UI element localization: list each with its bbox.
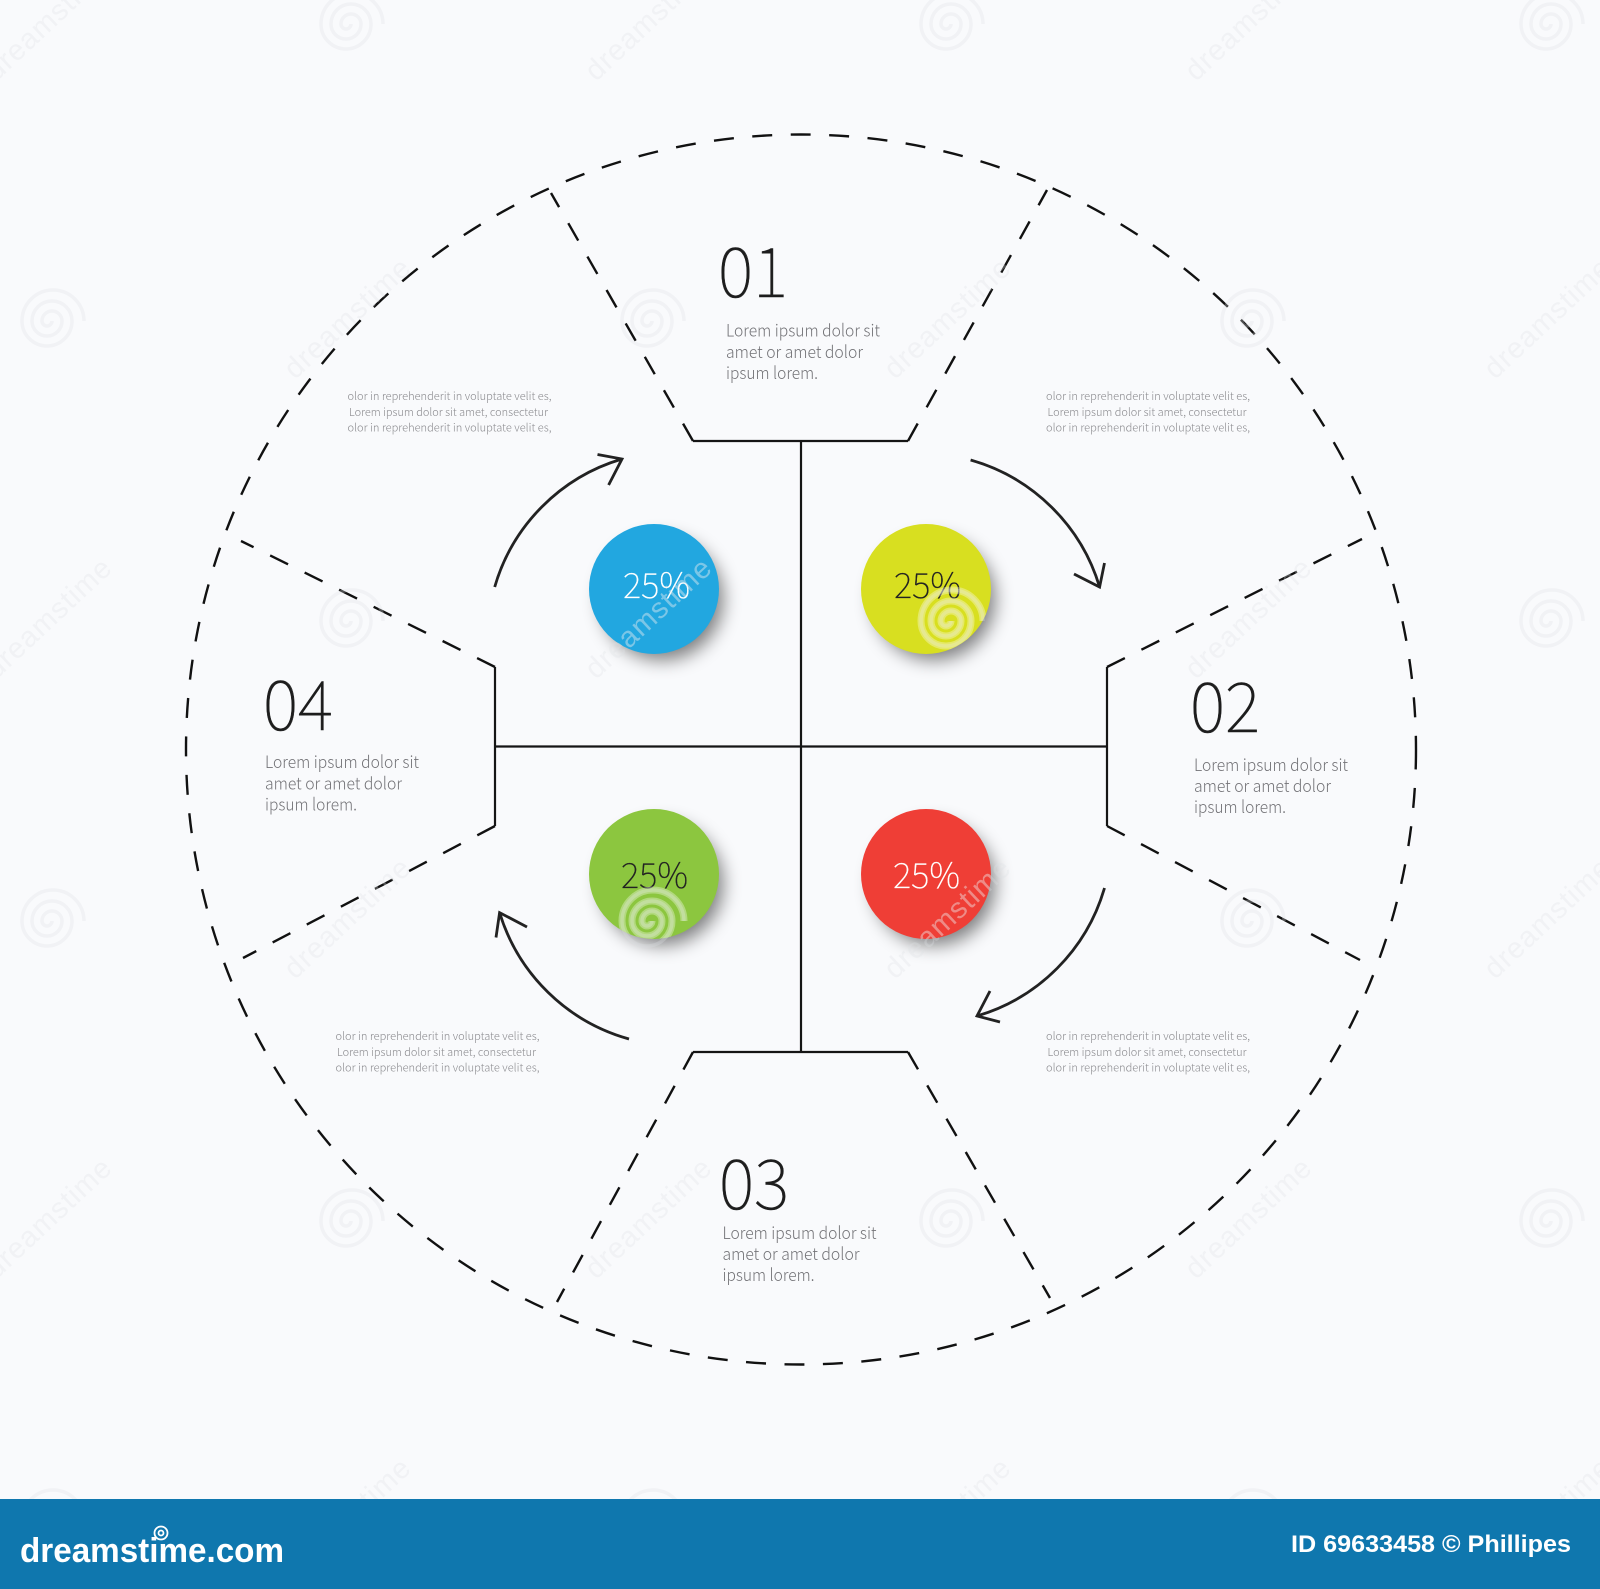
number 02 with caption: ipsum lorem. (1194, 793, 1286, 818)
arrow: top right (971, 460, 1104, 587)
panel: segment 02 outline (1107, 539, 1362, 960)
small text block: top left: olor in reprehenderit in voluptate velit es, (348, 420, 552, 436)
panel: segment 03 outline (557, 1052, 1050, 1302)
number 01 with caption: 01 (718, 217, 788, 317)
small text block: bottom right: olor in reprehenderit in voluptate velit es, (1046, 1060, 1250, 1076)
panel: segment 01 outline (551, 190, 1047, 441)
small text block: top left: Lorem ipsum dolor sit amet, consectetur (349, 404, 548, 420)
number 03 with caption: amet or amet dolor (722, 1240, 860, 1265)
watermark text: dreamstime (1179, 1152, 1319, 1285)
arrow: bottom right (977, 888, 1104, 1022)
badge: red 25%: 25% (893, 848, 960, 899)
dashed outer circle (186, 134, 1416, 1364)
watermark text: dreamstime (878, 252, 1018, 385)
number 01 with caption: ipsum lorem. (726, 359, 818, 384)
number 01 with caption: Lorem ipsum dolor sit (726, 316, 880, 342)
watermark overlay on badges: dreamstime (579, 552, 719, 685)
number 04 with caption: Lorem ipsum dolor sit (265, 748, 419, 773)
watermark text: dreamstime (278, 852, 418, 985)
number 01 with caption: amet or amet dolor (726, 338, 864, 363)
central cross lines (495, 441, 1107, 1052)
watermark text: dreamstime (878, 852, 1018, 985)
small text block: top left: olor in reprehenderit in voluptate velit es, (348, 388, 552, 404)
badge: green 25% (589, 809, 723, 945)
panel: segment 04 outline (241, 541, 495, 958)
badge: blue 25%: 25% (623, 558, 690, 609)
number 02 with caption (1190, 652, 1348, 818)
arrow: bottom left (496, 913, 629, 1039)
small text block: top right: olor in reprehenderit in voluptate velit es, (1046, 420, 1250, 436)
watermark text: dreamstime (278, 1452, 418, 1585)
number 04 with caption (263, 650, 419, 816)
small text block: bottom left: olor in reprehenderit in voluptate velit es, (336, 1028, 540, 1044)
number 03 with caption (719, 1129, 877, 1286)
logo text: dreamstime.com (20, 1532, 284, 1570)
small text block: bottom right: Lorem ipsum dolor sit amet, consectetur (1048, 1044, 1247, 1060)
image id and author: ID 69633458 © Phillipes (1291, 1531, 1571, 1558)
watermark overlay on badges (618, 562, 991, 939)
small text block: bottom left: olor in reprehenderit in voluptate velit es, (336, 1060, 540, 1076)
footer banner (0, 1499, 1600, 1589)
number 04 with caption: ipsum lorem. (265, 790, 357, 816)
number 01 with caption (718, 217, 880, 384)
small text block: bottom right: olor in reprehenderit in voluptate velit es, (1046, 1028, 1250, 1044)
badge: green 25%: 25% (621, 848, 688, 899)
small text block: top right: olor in reprehenderit in voluptate velit es, (1046, 388, 1250, 404)
watermark text: dreamstime (1179, 552, 1319, 685)
small text block: top left (348, 388, 552, 436)
number 03 with caption: ipsum lorem. (722, 1261, 814, 1286)
watermark text: dreamstime (579, 1152, 719, 1285)
watermark overlay on badges: dreamstime (878, 852, 1018, 985)
badge: red 25% (861, 809, 995, 945)
small text block: bottom left: Lorem ipsum dolor sit amet, consectetur (337, 1044, 536, 1060)
small text block: bottom right (1046, 1028, 1250, 1076)
watermark text: dreamstime (579, 552, 719, 685)
number 04 with caption: amet or amet dolor (265, 770, 403, 794)
number 04 with caption: 04 (263, 650, 333, 750)
small text block: bottom left (336, 1028, 540, 1076)
badge: yellow 25%: 25% (894, 558, 961, 609)
watermark text: dreamstime (278, 252, 418, 385)
badge: yellow 25% (861, 524, 995, 660)
number 02 with caption: amet or amet dolor (1194, 772, 1332, 797)
number 02 with caption: Lorem ipsum dolor sit (1194, 751, 1348, 776)
small text block: top right (1046, 388, 1250, 436)
number 03 with caption: Lorem ipsum dolor sit (722, 1219, 877, 1244)
icon: logo spiral (154, 1526, 168, 1540)
small text block: top right: Lorem ipsum dolor sit amet, consectetur (1048, 404, 1247, 420)
number 02 with caption: 02 (1190, 652, 1260, 752)
watermark text: dreamstime (878, 1452, 1018, 1585)
badge: blue 25% (589, 524, 723, 660)
number 03 with caption: 03 (719, 1129, 789, 1229)
arrow: top left (495, 454, 622, 587)
